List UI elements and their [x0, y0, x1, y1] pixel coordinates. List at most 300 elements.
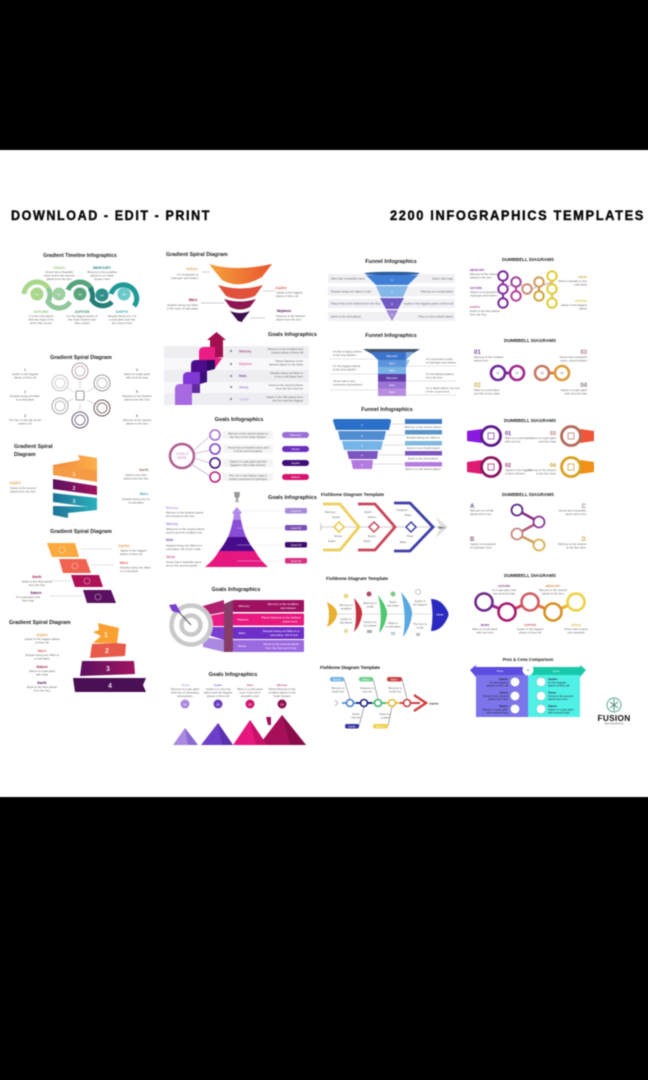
panel: goals mountains: Jupiter is a very big [206, 687, 231, 691]
panel: spiral steps: Jupiter [118, 544, 131, 548]
panel: dumbbell tabs: and has rings [539, 440, 557, 444]
panel: goals mountains: Mars is a cold place [237, 687, 263, 691]
panel: goals pyramid: Mars [166, 538, 174, 542]
panel: funnel one: 2 [391, 290, 393, 294]
panel: funnel two: poisonous atmosphere [333, 382, 363, 386]
panel: dumbbell wave [472, 573, 588, 634]
panel: fishbone crescents: Mars is [388, 621, 398, 625]
panel: fishbone nodes: Mercury is [331, 686, 345, 690]
panel: gradient timeline: SATURN [34, 310, 49, 314]
panel: spiral banner: Despite being red, it's [122, 497, 150, 501]
panel: gradient timeline: It is the biggest planet of [66, 314, 98, 318]
panel: dumbbell network: DUMBBELL DIAGRAMS [502, 257, 554, 262]
panel: fishbone crescents [326, 576, 448, 637]
panel: dumbbell wave: MARS [481, 623, 489, 627]
panel: goals mountains: smallest planet in the [268, 690, 296, 694]
panel: dumbbell chain: Mercury is the closest [558, 542, 586, 546]
panel: gradient timeline: the Solar System and [68, 318, 96, 322]
panel: goals pyramid: Venus [166, 555, 176, 559]
panel: gradient timeline: planet from the Sun [46, 277, 72, 281]
panel: spiral funnel: Gradient Spiral Diagram [166, 252, 228, 258]
panel: dumbbell wave: has several rings [493, 592, 515, 596]
panel: gradient timeline: also a giant [75, 321, 90, 325]
panel: dumbbell chain: DUMBBELL DIAGRAMS [502, 492, 554, 497]
panel: dumbbell wave: with red color [476, 630, 494, 634]
panel: goals mountains: Solar System [273, 694, 291, 698]
panel: fishbone crescents: Mercury is [339, 603, 353, 607]
panel: spiral stack: Saturn is a gas giant [29, 669, 55, 673]
panel: funnel two: of hydrogen and helium [426, 360, 457, 364]
panel: dumbbell tabs: Mercury is the closest [528, 468, 556, 472]
panel: dumbbell network: cold place [574, 282, 587, 286]
panel: pros and cons comparison: planet from Sun [488, 697, 508, 701]
panel: spiral funnel: Neptune is the farthest [276, 314, 305, 318]
panel: spiral stack: 1 [104, 632, 108, 639]
panel: dumbbell tabs: of them all here [505, 472, 525, 476]
panel: gradient spiral hexagon: 5 [136, 390, 138, 394]
panel: spiral funnel: Jupiter [275, 286, 288, 290]
panel: goals target: from the Sun and is hot [265, 646, 297, 650]
panel: dumbbell chain: Jupiter is composed [470, 542, 496, 546]
panel: fishbone chevrons: Pluto [405, 513, 412, 517]
panel: fishbone nodes: Mars [391, 677, 398, 681]
panel: fishbone nodes: Fishbone Diagram Template [320, 665, 380, 671]
panel: spiral funnel: planet from the Sun [276, 318, 302, 322]
panel: dumbbell network: SATURN [470, 286, 482, 290]
panel: gradient spiral hexagon: planet from the Sun [124, 398, 150, 402]
panel: fishbone nodes: small one [332, 690, 345, 694]
panel: dumbbell tabs: 02 [505, 463, 511, 469]
panel: goals mountains: atmosphere [177, 694, 193, 698]
panel: gradient spiral hexagon: 3 [24, 414, 26, 418]
panel: goals pyramid: Goal 04 [291, 559, 302, 563]
panel: dumbbell network [470, 257, 588, 316]
panel: fishbone crescents: has water [387, 604, 399, 608]
panel: spiral stack: Gradient Spiral Diagram [9, 620, 71, 626]
panel: goals stairs arrow: Mercury [239, 350, 252, 354]
panel: fishbone crescents: a star [416, 626, 424, 630]
panel: fishbone crescents: smallest [341, 606, 351, 610]
panel: goals target [169, 587, 304, 652]
panel: funnel two: Item [389, 390, 395, 394]
panel: fishbone crescents: big planet [340, 620, 352, 624]
panel: goals circle list: HERE [177, 456, 188, 460]
panel: spiral banner: 3 [73, 499, 76, 505]
panel: spiral banner: planet from the Sun [10, 490, 36, 494]
panel: spiral banner: a cold place [128, 500, 144, 504]
panel: dumbbell pairs: 01 [496, 371, 500, 375]
panel: dumbbell pairs: 04 [580, 383, 588, 389]
panel: dumbbell chain: A [470, 504, 475, 510]
panel: gradient timeline: JUPITER [74, 310, 90, 314]
panel: dumbbell chain: D [582, 537, 587, 543]
panel: dumbbell pairs: 02 [515, 371, 519, 375]
panel: fishbone chevrons: Fishbone Diagram Template [321, 492, 384, 498]
panel: dumbbell pairs: and full of iron oxide [474, 392, 500, 396]
panel: dumbbell pairs: Mercury is the smallest [474, 355, 504, 359]
panel: pros and cons comparison: Cons [552, 669, 560, 673]
panel: spiral funnel: planet of them all [276, 294, 298, 298]
panel: dumbbell pairs: Venus has a beautiful [559, 355, 587, 359]
panel: funnel three [333, 407, 442, 471]
panel: funnel one: 4 [391, 313, 393, 317]
panel: goals target: Planet Neptune is the farthest [261, 616, 301, 620]
panel: spiral stack: Mars [38, 649, 46, 653]
panel: pros and cons comparison: Jupiter [499, 677, 509, 681]
panel: funnel two: It's a dwarf planet, but one [426, 386, 460, 390]
panel: funnel two: at the time Earth's [333, 353, 357, 357]
panel: fishbone chevrons: Saturn [368, 515, 377, 519]
panel: goals circle list: it is the second planet [234, 449, 262, 453]
panel: gradient timeline: name and is the second [44, 274, 75, 278]
panel: dumbbell pairs: planet here [474, 358, 489, 362]
panel: funnel two: Item [389, 368, 395, 372]
panel: fishbone nodes: a giant [381, 716, 390, 720]
panel: funnel three: Earth is the third planet [408, 456, 438, 460]
panel: funnel two: Venus has a very [333, 379, 356, 383]
panel: fishbone chevrons [320, 492, 448, 551]
panel: dumbbell network: planet to the Sun [470, 276, 492, 280]
panel: funnel two: Item [389, 383, 395, 387]
panel: funnel one: Jupiter is the biggest planet of them all [404, 302, 453, 306]
panel: funnel one: Mars has a beautiful name [331, 276, 365, 280]
panel: spiral banner [9, 444, 150, 518]
panel: funnel two: of the moons here [426, 390, 450, 394]
panel: dumbbell tabs: 04 [550, 463, 557, 469]
panel: fishbone nodes: has life [351, 716, 361, 720]
panel: fishbone nodes: Mercury is [388, 686, 402, 690]
panel: spiral stack: 2 [105, 648, 109, 655]
panel: funnel two: Element [386, 354, 398, 358]
panel: goals pyramid: and is the second planet [166, 564, 198, 568]
panel: pros and cons comparison: Saturn [499, 704, 508, 708]
panel: gradient spiral hexagon: center of it [18, 422, 32, 426]
panel: fishbone nodes: Earth [353, 712, 360, 716]
panel: funnel three: 4 [361, 454, 363, 458]
panel: dumbbell pairs: with several rings [565, 392, 588, 396]
panel: gradient timeline: 01 [35, 292, 39, 296]
panel: spiral stack: Jupiter is the biggest planet [24, 637, 60, 641]
panel: spiral steps: Earth is the third planet [22, 580, 52, 584]
panel: pros and cons comparison: planet of them all [548, 684, 570, 688]
panel: dumbbell wave: MERCURY [546, 584, 560, 588]
panel: fishbone crescents: a cold place [385, 624, 401, 628]
panel: gradient spiral hexagon: Saturn is a gas giant [124, 372, 150, 376]
panel: goals stairs arrow: the Sun and the biggest [272, 398, 303, 402]
panel: spiral steps: from the Sun [29, 583, 46, 587]
panel: funnel two: It's composed mostly [426, 357, 453, 361]
panel: funnel one: Earth is the third planet [331, 314, 361, 318]
panel: gradient spiral hexagon: with several rings [126, 376, 149, 380]
panel: dumbbell chain [470, 492, 587, 550]
panel: gradient spiral hexagon: Gradient Spiral Diagram [50, 355, 112, 361]
panel: goals mountains: 04 [280, 702, 284, 706]
panel: dumbbell chain: Venus has a beautiful [558, 508, 586, 512]
panel: funnel three: 5 [361, 463, 363, 467]
panel: goals mountains: Goals Infographics [209, 672, 257, 678]
panel: dumbbell wave: VENUS [571, 623, 581, 627]
panel: fishbone crescents: Mercury is [363, 601, 377, 605]
panel: dumbbell network: Earth is the third planet [470, 309, 500, 313]
panel: gradient timeline: two moons here [112, 321, 133, 325]
panel: dumbbell pairs: 03 [580, 350, 588, 356]
panel: dumbbell chain: C [582, 504, 587, 510]
panel: funnel one: Planet that is the farthest from the Sun [331, 302, 381, 306]
panel: spiral banner: planet from the Sun [123, 476, 149, 480]
panel: goals pyramid: and it's just the smallest one [166, 530, 203, 534]
panel: goals circle list: Goals Infographics [215, 417, 263, 423]
panel: spiral stack: 4 [108, 683, 112, 690]
panel: fishbone chevrons: Saturn [368, 534, 377, 538]
panel: spiral steps: Jupiter is the biggest [120, 548, 147, 552]
panel: gradient timeline: 04 [100, 294, 104, 298]
panel: funnel three: Mars is a cold desert planet [405, 467, 441, 471]
panel: fishbone nodes: small one [389, 690, 402, 694]
panel: fishbone nodes: Saturn [376, 724, 385, 728]
panel: pros and cons comparison: with several rings [548, 710, 570, 714]
panel: goals mountains: 03 [248, 702, 252, 706]
panel: fishbone nodes: Venus [333, 677, 342, 681]
panel: goals circle list: Venus [291, 447, 300, 451]
panel: pros and cons comparison: planet of them all [487, 684, 508, 688]
panel: dumbbell pairs: name, second planet [560, 358, 587, 362]
panel: funnel two: Item [389, 362, 395, 366]
panel: spiral banner: Diagram [14, 452, 36, 458]
panel: goals mountains: planet and the biggest [204, 690, 232, 694]
panel: goals mountains: Planet Mercury is the [268, 687, 296, 691]
panel: funnel one: Despite being red, Mars is cold [331, 290, 371, 294]
panel: dumbbell wave: DUMBBELL DIAGRAMS [504, 573, 556, 578]
panel: goals stairs arrow: closest planet of them all [271, 350, 303, 354]
panel: spiral stack: of them all [35, 640, 49, 644]
panel: spiral steps: planet of them all [120, 552, 142, 556]
panel: goals mountains: Mercury is a gas giant [171, 687, 199, 691]
panel: funnel one: Mercury is a small planet [421, 290, 453, 294]
panel: dumbbell wave: Mercury is the closest [539, 588, 567, 592]
panel: pros and cons comparison: Jupiter [548, 677, 558, 681]
panel: dumbbell tabs: to the Sun here [536, 472, 556, 476]
panel: gradient timeline: and it has moons [30, 321, 53, 325]
panel: funnel three: Despite being red, Mars is [406, 436, 440, 440]
panel: goals target: and closest [280, 606, 296, 610]
panel: dumbbell wave: Venus has a name [564, 627, 588, 631]
panel: spiral stack: from the Sun [34, 688, 51, 692]
logo: fusion: INFOGRAPHICS [604, 722, 624, 726]
panel: dumbbell chain: planet and is hot [470, 512, 491, 516]
panel: dumbbell network: from the Sun [470, 312, 487, 316]
panel: spiral banner: Earth is the third [125, 473, 147, 477]
panel: spiral steps: Mars [120, 561, 128, 565]
panel: dumbbell network: EARTH [470, 305, 480, 309]
panel: dumbbell wave: planet to the Sun [542, 592, 564, 596]
panel: goals mountains: Venus [181, 683, 190, 687]
panel: dumbbell pairs: DUMBBELL DIAGRAMS [504, 338, 556, 343]
panel: goals stairs arrow: Venus is the second planet [268, 383, 303, 387]
panel: dumbbell network: planet [579, 306, 587, 310]
panel: gradient timeline: 05 [122, 292, 126, 296]
panel: spiral funnel: is the color of cold place [167, 306, 198, 310]
panel: fishbone crescents: Jupiter is [414, 599, 426, 603]
panel: goals circle list [170, 417, 309, 482]
panel: dumbbell tabs: Saturn is a gas giant [530, 436, 556, 440]
panel: goals target: Goals Infographics [212, 587, 260, 593]
panel: spiral banner: Jupiter [9, 481, 22, 485]
panel: funnel two [330, 333, 460, 396]
panel: goals target: Venus is the second planet [263, 642, 299, 646]
panel: spiral stack: with rings [36, 672, 49, 676]
panel: gradient spiral hexagon: The Sun is the star at the [9, 418, 42, 422]
panel: fishbone crescents: Jupiter is [340, 617, 352, 621]
panel: goals circle list: Mercury is the closest planet to [228, 432, 268, 436]
panel: pros and cons comparison: Venus is the second [483, 694, 508, 698]
panel: dumbbell tabs: with red hue [505, 440, 521, 444]
panel: spiral banner: Venus is the second [10, 486, 36, 490]
panel: fishbone nodes: very far [362, 690, 372, 694]
panel: dumbbell tabs [467, 418, 594, 476]
panel: fishbone chevrons: Earth [329, 539, 336, 543]
panel: fishbone nodes: Earth [348, 724, 356, 728]
panel: dumbbell wave: Mars is a cold place [472, 627, 498, 631]
panel: goals target: planet here [282, 620, 298, 624]
panel: gradient spiral hexagon: 6 [136, 414, 138, 418]
panel: gradient spiral hexagon: 1 [24, 368, 26, 372]
panel: gradient spiral hexagon: 2 [24, 390, 26, 394]
panel: dumbbell tabs: Jupiter is the biggest [505, 468, 532, 472]
panel: pros and cons comparison: Saturn is a gas giant [482, 708, 508, 712]
panel: funnel one: Pluto is now a dwarf planet [418, 314, 453, 318]
panel: goals mountains: planet of them all [207, 694, 229, 698]
panel: goals mountains: 01 [183, 702, 187, 706]
panel: goals stairs arrow: Goals Infographics [268, 332, 317, 338]
panel: gradient spiral hexagon: Mercury is the closest [123, 418, 151, 422]
panel: pros and cons comparison: Venus [548, 690, 557, 694]
panel: dumbbell wave: JUPITER [524, 623, 537, 627]
panel: funnel two: It's the farthest planet [426, 372, 454, 376]
panel: goals mountains [171, 672, 306, 745]
panel: fishbone chevrons: Jupiter [332, 515, 340, 519]
panel: gradient spiral hexagon: is a cold place [16, 398, 35, 402]
panel: goals pyramid: Goal 01 [291, 509, 302, 513]
logo: fusion [598, 698, 630, 726]
panel: dumbbell pairs: 04 [560, 371, 564, 375]
panel: goals circle list: biggest in the Solar System [230, 463, 266, 467]
panel: goals mountains: Jupiter [214, 683, 222, 687]
panel: dumbbell tabs: Mars is a cold place [505, 436, 531, 440]
panel: fishbone crescents: Venus is a [363, 620, 377, 624]
panel: dumbbell pairs: Mars is a cold place [474, 388, 500, 392]
panel: goals circle list: Jupiter [291, 461, 300, 465]
panel: dumbbell network: hydrogen and helium [470, 294, 498, 298]
panel: dumbbell wave: very beautiful [567, 630, 585, 634]
panel: dumbbell pairs [474, 338, 588, 396]
panel: goals target: Neptune [237, 618, 249, 622]
panel: gradient timeline: EARTH [116, 310, 129, 314]
panel: goals stairs arrow: Mars [239, 374, 247, 378]
panel: pros and cons comparison: It's the biggest [490, 680, 508, 684]
panel: pros and cons comparison: with several rings [486, 710, 509, 714]
panel: spiral banner: 2 [73, 486, 76, 492]
panel: gradient timeline: VENUS [53, 266, 66, 270]
panel: dumbbell wave: SATURN [498, 584, 510, 588]
panel: spiral funnel: It's composed of [177, 272, 198, 276]
panel: goals target: Mars [239, 631, 246, 635]
panel: gradient spiral hexagon: planet to the Sun [126, 422, 148, 426]
panel: fishbone crescents: small [367, 604, 374, 608]
panel: fishbone nodes: Saturn is [379, 712, 391, 716]
panel: goals pyramid: Venus has a beautiful name [166, 560, 202, 564]
panel: goals stairs arrow: Despite being red Mars is [270, 371, 304, 375]
panel: goals target: Mercury [239, 604, 250, 608]
panel: dumbbell wave: Jupiter is the biggest [517, 627, 543, 631]
panel: goals pyramid [166, 492, 317, 568]
black top bar [0, 0, 648, 150]
black bottom bar [0, 797, 648, 1080]
panel: gradient timeline: a cold place and has [109, 318, 136, 322]
panel: fishbone chevrons: Mercury [325, 510, 336, 514]
panel: dumbbell tabs: 03 [550, 431, 556, 437]
panel: goals stairs arrow: farthest planet in the Solar [269, 362, 303, 366]
panel: funnel three: Funnel Infographics [361, 407, 413, 413]
panel: goals circle list: mostly composed of hydrogen [229, 477, 268, 481]
panel: dumbbell chain: B [470, 537, 475, 543]
panel: goals pyramid: cold place, full of iron oxide [166, 547, 201, 551]
panel: spiral stack: Earth is the third planet [27, 685, 57, 689]
panel: funnel two: at the time Earth's [333, 368, 357, 372]
panel: spiral banner: 1 [73, 472, 76, 478]
panel: spiral steps [16, 529, 151, 603]
panel: goals mountains: Mars [247, 683, 254, 687]
panel: funnel two: from the Sun [426, 376, 443, 380]
panel: spiral funnel: Mars [189, 298, 197, 302]
panel: goals mountains: Mercury [277, 683, 288, 687]
panel: fishbone crescents: the biggest [413, 602, 427, 606]
panel: goals circle list: Saturn [291, 475, 300, 479]
panel: gradient timeline: MERCURY [93, 266, 112, 270]
panel: funnel two: It's like a happy planet [333, 350, 362, 354]
panel: funnel three: 3 [361, 444, 363, 448]
panel: funnel one: Saturn has rings [432, 276, 454, 280]
panel: fishbone chevrons: Mars [400, 540, 407, 544]
panel: goals mountains: even if the red is [239, 690, 261, 694]
panel: spiral funnel: Despite being red, Mars [167, 303, 199, 307]
heading: download edit print: DOWNLOAD - EDIT - PRINT [11, 207, 211, 223]
panel: gradient spiral hexagon [9, 355, 152, 428]
panel: spiral steps: It's a gas giant and [16, 595, 40, 599]
panel: spiral stack [9, 620, 146, 692]
panel: spiral steps: Earth [32, 575, 42, 579]
panel: goals stairs arrow: Jupiter is the fifth planet from [266, 395, 304, 399]
panel: fishbone chevrons: Venus [334, 534, 343, 538]
panel: spiral funnel [166, 252, 305, 322]
panel: dumbbell pairs: Saturn is a gas giant [561, 388, 587, 392]
panel: goals pyramid: Mercury is the farthest planet [166, 510, 203, 514]
panel: fishbone crescents: hot planet [364, 624, 377, 628]
panel: pros and cons comparison: Pros [497, 669, 504, 673]
panel: dumbbell tabs: DUMBBELL DIAGRAMS [504, 418, 556, 423]
panel: goals pyramid: Despite being red, Mars is a [166, 544, 202, 548]
panel: pros and cons comparison: Saturn [548, 704, 557, 708]
panel: dumbbell pairs: 02 [474, 383, 481, 389]
panel: goals stairs arrow: Mercury is the smallest and [268, 347, 303, 351]
panel: fishbone nodes [320, 665, 440, 728]
panel: pros and cons comparison: planet from Sun [548, 697, 568, 701]
panel: goals pyramid: Welcome to the closest planet [166, 527, 205, 531]
panel: dumbbell chain: of hydrogen here [470, 546, 492, 550]
panel: fishbone crescents: Fishbone Diagram Template [326, 576, 388, 582]
panel: fishbone chevrons: Earth [365, 510, 372, 514]
panel: gradient timeline: planet in our Solar [90, 274, 114, 278]
panel: goals stairs arrow: Jupiter [239, 398, 250, 402]
